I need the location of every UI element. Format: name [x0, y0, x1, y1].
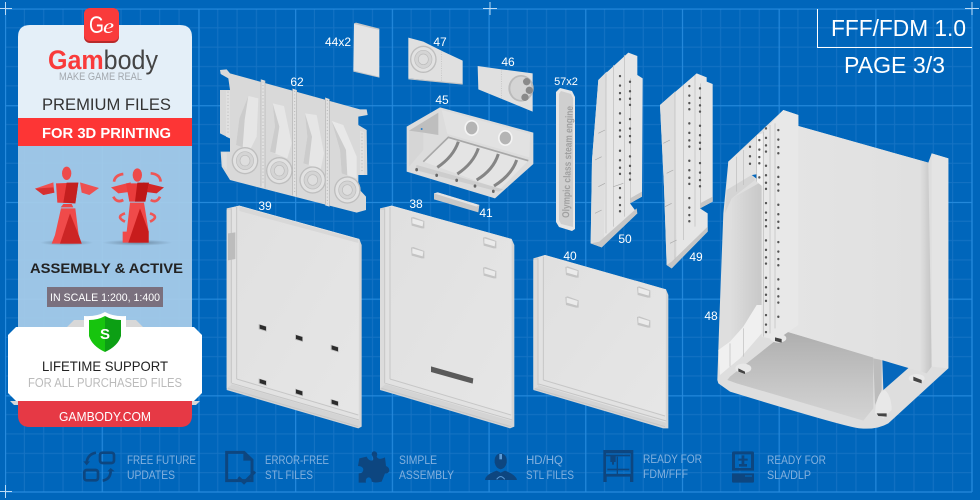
badge: FFF/FDM version: FFF/FDM 1.0: [831, 15, 966, 41]
icon: Ge logo: e: [103, 14, 114, 38]
support ribbon back: [10, 320, 200, 406]
part 62: [220, 69, 368, 213]
corner bosses: [770, 334, 786, 343]
part number labels: 46: [501, 55, 515, 69]
sidebar light blue section: [18, 146, 192, 336]
part 45: [407, 107, 533, 198]
panel: sidebar: [8, 8, 202, 427]
feature: ready for SLA/DLP: READY FOR: [767, 455, 826, 467]
icon: armoured bust: [485, 453, 517, 480]
blue window through the frame: [752, 173, 910, 390]
feature: ready for FDM/FFF: [603, 450, 702, 482]
feature: simple assembly: ASSEMBLY: [399, 470, 454, 482]
feature: HD/HQ STL files: STL FILES: [526, 470, 574, 482]
part number labels: 62: [290, 75, 304, 89]
part number labels: 48: [704, 309, 718, 323]
red footer: [18, 398, 192, 427]
icon: updates: [83, 453, 115, 481]
part 41: [434, 192, 479, 212]
part 47: [408, 38, 463, 85]
red footer: GAMBODY.COM: [59, 410, 151, 424]
icon: SLA printer: [732, 451, 754, 483]
feature: error-free STL files: STL FILES: [265, 470, 313, 482]
part number labels: 40: [563, 249, 577, 263]
sidebar top card: [18, 25, 192, 120]
badge: FFF/FDM version: PAGE 3/3: [844, 52, 945, 78]
heading: premium files: PREMIUM FILES: [42, 95, 171, 114]
part 57 nameplate: [556, 88, 576, 231]
part 48: [717, 110, 948, 429]
icon: articulated red figure: [102, 168, 172, 246]
support card: [8, 327, 202, 401]
icon: checked document: [227, 452, 255, 483]
icon: assembled red figure: [35, 167, 99, 246]
feature: ready for SLA/DLP: SLA/DLP: [767, 470, 811, 482]
part number labels: 47: [433, 35, 447, 49]
scale label: IN SCALE 1:200, 1:400: [50, 292, 160, 304]
inner floor: [727, 332, 873, 421]
support card: LIFETIME SUPPORT: [42, 358, 168, 374]
front strips and bolts: [762, 110, 798, 340]
part 39: [227, 206, 362, 428]
part number labels: 41: [479, 206, 493, 220]
part number labels: 49: [689, 250, 703, 264]
feature: simple assembly: [358, 451, 454, 483]
red banner: FOR 3D PRINTING: [42, 125, 171, 142]
feature: free future updates: UPDATES: [127, 470, 175, 482]
support card: FOR ALL PURCHASED FILES: [28, 376, 182, 390]
feature: ready for FDM/FFF: FDM/FFF: [643, 469, 688, 481]
part number labels: 44x2: [325, 35, 351, 49]
part 40: [533, 255, 668, 428]
feature: ready for SLA/DLP: [732, 451, 826, 483]
inner left wall: [730, 182, 762, 342]
scale label: [47, 287, 163, 307]
red banner: [18, 118, 192, 146]
part 46: [478, 66, 534, 112]
feature: error-free STL files: ERROR-FREE: [265, 455, 329, 467]
part number labels: 50: [618, 232, 632, 246]
part 57 nameplate: Olympic class steam engine: [561, 105, 576, 218]
part number labels: 45: [435, 93, 449, 107]
feature: simple assembly: SIMPLE: [399, 455, 437, 467]
icon: puzzle piece: [358, 451, 389, 483]
icon: Ge logo: G: [89, 12, 104, 39]
part number labels: [258, 35, 718, 323]
part 38: [380, 206, 514, 428]
part number labels: 38: [409, 197, 423, 211]
feature: free future updates: [83, 453, 196, 482]
feature: free future updates: FREE FUTURE: [127, 455, 196, 467]
feature: HD/HQ STL files: [485, 453, 574, 482]
badge: FFF/FDM version: [818, 9, 972, 78]
feature: HD/HQ STL files: HD/HQ: [526, 455, 563, 467]
icon: green shield: S: [100, 326, 110, 343]
logo wordmark: Gambody: [48, 45, 158, 75]
part 44: [353, 23, 379, 78]
part 49: [660, 73, 713, 268]
part number labels: 39: [258, 199, 272, 213]
feature: error-free STL files: [227, 452, 329, 483]
body silhouette: [717, 110, 948, 429]
back panel: [787, 126, 932, 373]
part 50: [591, 53, 643, 247]
icon: Ge logo: [84, 8, 119, 43]
part number labels: 57x2: [554, 76, 578, 88]
icon: FDM printer: [603, 450, 633, 482]
icon: green shield: [84, 312, 126, 354]
heading: assembly and active: ASSEMBLY & ACTIVE: [30, 260, 183, 276]
feature: ready for FDM/FFF: READY FOR: [643, 454, 702, 466]
tagline: MAKE GAME REAL: [59, 71, 142, 83]
